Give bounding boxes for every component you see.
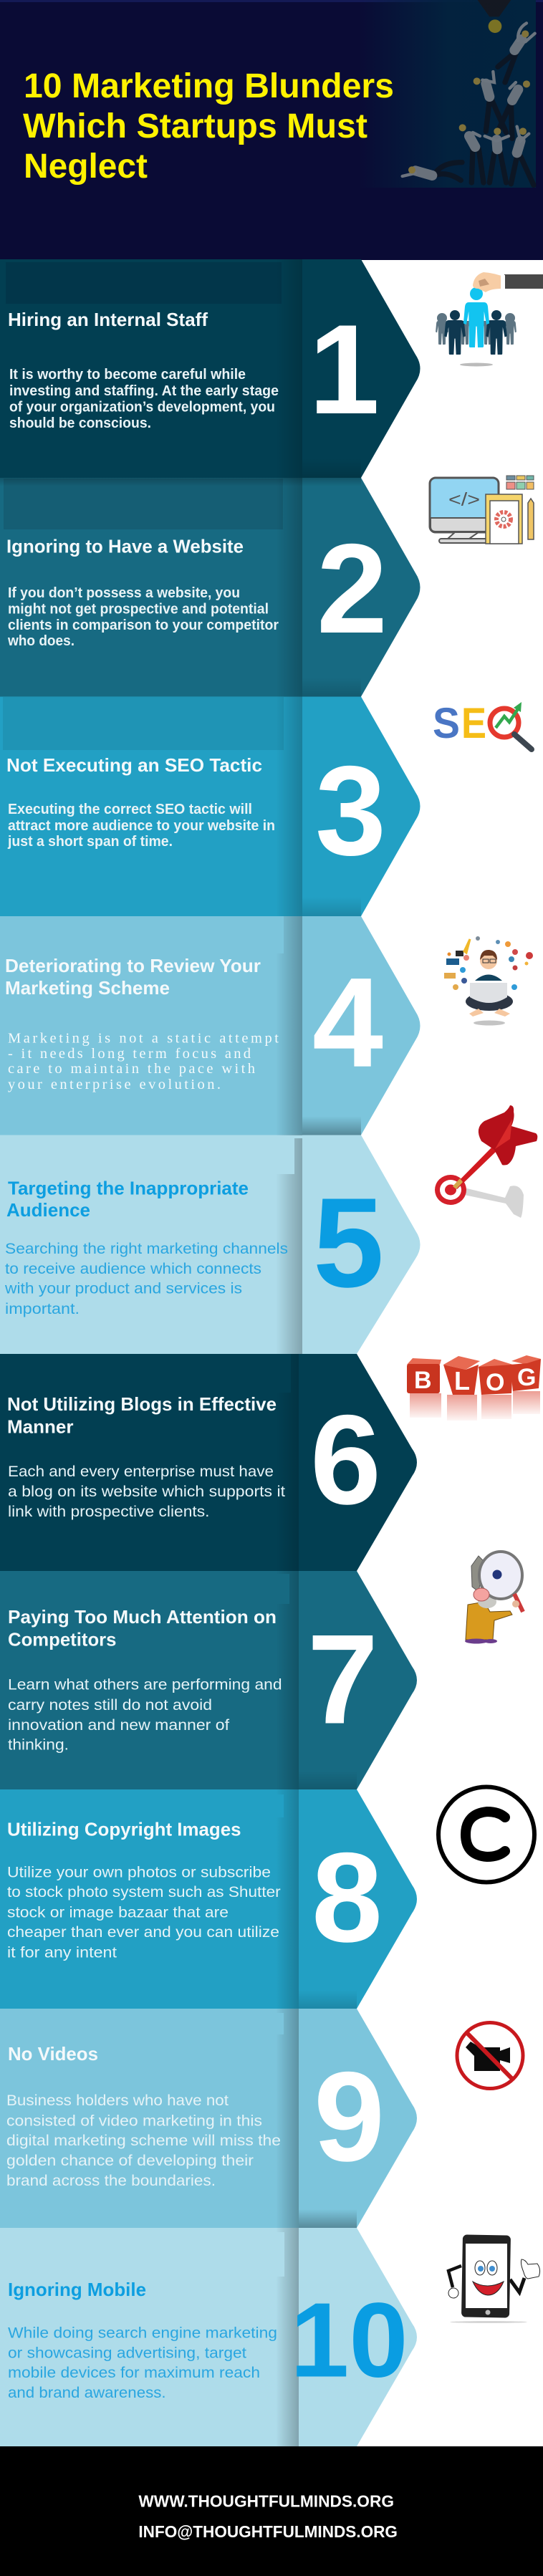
body text 10: or showcasing advertising, target <box>8 2345 246 2362</box>
panel 8: copyright: 8 <box>312 1826 383 1969</box>
body text 2: might not get prospective and potential <box>8 602 269 617</box>
panel 8: copyright: Utilizing Copyright Images <box>7 1819 241 1840</box>
body text 5: with your product and services is <box>4 1281 242 1297</box>
body text 6 <box>8 1464 285 1520</box>
icon: BLOG cubes: L <box>454 1366 470 1395</box>
icon: SEO logo: S <box>433 699 460 747</box>
body text 8: it for any intent <box>7 1944 117 1961</box>
body text 4: Marketing is not a static attempt <box>8 1030 279 1046</box>
body text 7: Learn what others are performing and <box>8 1677 282 1693</box>
icon: web development: </> <box>448 489 480 510</box>
body text 7: innovation and new manner of <box>8 1717 229 1734</box>
heading 5: Targeting the Inappropriate <box>8 1178 249 1199</box>
body text 5: important. <box>5 1301 80 1317</box>
heading 4: Marketing Scheme <box>5 977 170 999</box>
body text 9 <box>6 2092 281 2189</box>
body text 1: should be conscious. <box>9 415 151 431</box>
icon: copyright symbol <box>438 1787 534 1883</box>
panel 5: audience: 5 <box>313 1171 384 1314</box>
illustration: climbing businessmen and light bulb <box>403 0 535 185</box>
body text 9: golden chance of developing their <box>6 2153 254 2169</box>
panel 4: marketing scheme <box>0 916 533 1135</box>
panel 9: videos <box>0 2009 523 2228</box>
panel 2: website: 2 <box>317 517 388 660</box>
panel 3: SEO: 3 <box>315 739 386 882</box>
panel 1: hiring: Hiring an Internal Staff <box>8 309 208 330</box>
icon: hiring people <box>436 272 543 367</box>
heading 7: Paying Too Much Attention on <box>8 1606 277 1628</box>
footer <box>0 2446 543 2576</box>
icon: detective with magnifying glass <box>465 1552 523 1643</box>
heading 6: Not Utilizing Blogs in Effective <box>7 1393 277 1415</box>
panel 3: SEO <box>0 696 532 916</box>
panel 10: mobile: 10 <box>290 2281 408 2400</box>
body text 3: just a short span of time. <box>7 834 173 850</box>
body text 8: to stock photo system such as Shutter <box>7 1884 281 1900</box>
body text 8: stock or image bazaar that are <box>7 1905 229 1921</box>
body text 10: and brand awareness. <box>8 2385 166 2401</box>
body text 4 <box>8 1030 279 1092</box>
body text 6: link with prospective clients. <box>8 1504 209 1520</box>
email address: INFO@THOUGHTFULMINDS.ORG <box>138 2522 398 2541</box>
heading 4 <box>5 955 261 999</box>
body text 2: If you don’t possess a website, you <box>8 585 240 601</box>
body text 5: Searching the right marketing channels <box>5 1241 288 1257</box>
icon: BLOG cubes <box>407 1355 541 1421</box>
body text 2 <box>7 585 279 649</box>
icon: SEO logo <box>433 699 532 749</box>
panel 4: marketing scheme: 4 <box>312 951 383 1094</box>
panel 1: hiring: 1 <box>309 298 380 441</box>
title: Neglect <box>24 148 148 186</box>
icon: SEO logo: E <box>461 699 486 747</box>
body text 10 <box>8 2325 277 2401</box>
title <box>23 67 394 186</box>
body text 7: thinking. <box>8 1737 69 1754</box>
body text 5: to receive audience which connects <box>5 1261 261 1277</box>
heading 6: Manner <box>7 1416 73 1438</box>
panel 10: mobile: Ignoring Mobile <box>8 2279 146 2300</box>
icon: no video camera <box>457 2023 523 2089</box>
panel 6: blogs <box>0 1354 541 1571</box>
heading 7: Competitors <box>8 1629 116 1650</box>
panel 8: copyright <box>0 1787 534 2009</box>
panel 1: hiring <box>0 259 543 478</box>
body text 3 <box>7 802 275 850</box>
icon: BLOG cubes: G <box>517 1364 536 1391</box>
body text 8 <box>7 1865 281 1961</box>
heading 4: Deteriorating to Review Your <box>5 955 261 976</box>
body text 6: a blog on its website which supports it <box>8 1484 285 1500</box>
body text 8: cheaper than ever and you can utilize <box>7 1924 279 1941</box>
website url: WWW.THOUGHTFULMINDS.ORG <box>138 2492 394 2511</box>
body text 7 <box>8 1677 282 1754</box>
body text 10: While doing search engine marketing <box>8 2325 277 2341</box>
panel 2: website <box>0 476 534 696</box>
body text 9: Business holders who have not <box>6 2092 229 2109</box>
body text 9: digital marketing scheme will miss the <box>6 2133 281 2149</box>
body text 7: carry notes still do not avoid <box>8 1697 212 1714</box>
body text 8: Utilize your own photos or subscribe <box>7 1865 271 1881</box>
body text 4: your enterprise evolution. <box>8 1077 221 1092</box>
heading 7 <box>8 1606 277 1650</box>
body text 6: Each and every enterprise must have <box>8 1464 274 1480</box>
panel 10: mobile <box>0 2228 540 2446</box>
panel 6: blogs: 6 <box>310 1388 381 1531</box>
icon: web development <box>430 476 534 544</box>
icon: dart hitting target <box>435 1105 537 1218</box>
icon: BLOG cubes: O <box>486 1369 504 1396</box>
body text 9: brand across the boundaries. <box>6 2173 216 2189</box>
title: 10 Marketing Blunders <box>24 67 394 105</box>
body text 3: Executing the correct SEO tactic will <box>8 802 252 817</box>
title: Which Startups Must <box>23 107 367 145</box>
panel 5: audience <box>0 1105 537 1354</box>
panel 7: competitors <box>0 1552 523 1789</box>
body text 9: consisted of video marketing in this <box>6 2113 262 2129</box>
heading 5: Audience <box>6 1199 90 1221</box>
body text 4: care to maintain the pace with <box>8 1061 255 1077</box>
panel 7: competitors: 7 <box>307 1607 378 1751</box>
panel 3: SEO: Not Executing an SEO Tactic <box>6 754 262 776</box>
heading 5 <box>6 1178 249 1221</box>
panel 9: videos: 9 <box>314 2045 385 2188</box>
header panel <box>0 0 543 260</box>
body text 5 <box>4 1241 288 1317</box>
icon: BLOG cubes: B <box>414 1367 432 1394</box>
panel 9: videos: No Videos <box>8 2043 98 2065</box>
body text 1: It is worthy to become careful while <box>9 367 246 383</box>
icon: man with laptop and social media <box>444 936 533 1026</box>
body text 3: attract more audience to your website in <box>8 818 275 834</box>
panel 2: website: Ignoring to Have a Website <box>6 536 244 557</box>
body text 1: of your organization’s development, you <box>9 400 275 415</box>
heading 6 <box>7 1393 277 1438</box>
body text 2: clients in comparison to your competitor <box>8 617 279 633</box>
body text 1: investing and staffing. At the early stage <box>9 383 279 399</box>
body text 1 <box>9 367 279 431</box>
body text 4: - it needs long term focus and <box>8 1046 251 1062</box>
body text 10: mobile devices for maximum reach <box>8 2365 260 2381</box>
body text 2: who does. <box>7 633 75 649</box>
icon: smiling phone <box>448 2234 540 2323</box>
